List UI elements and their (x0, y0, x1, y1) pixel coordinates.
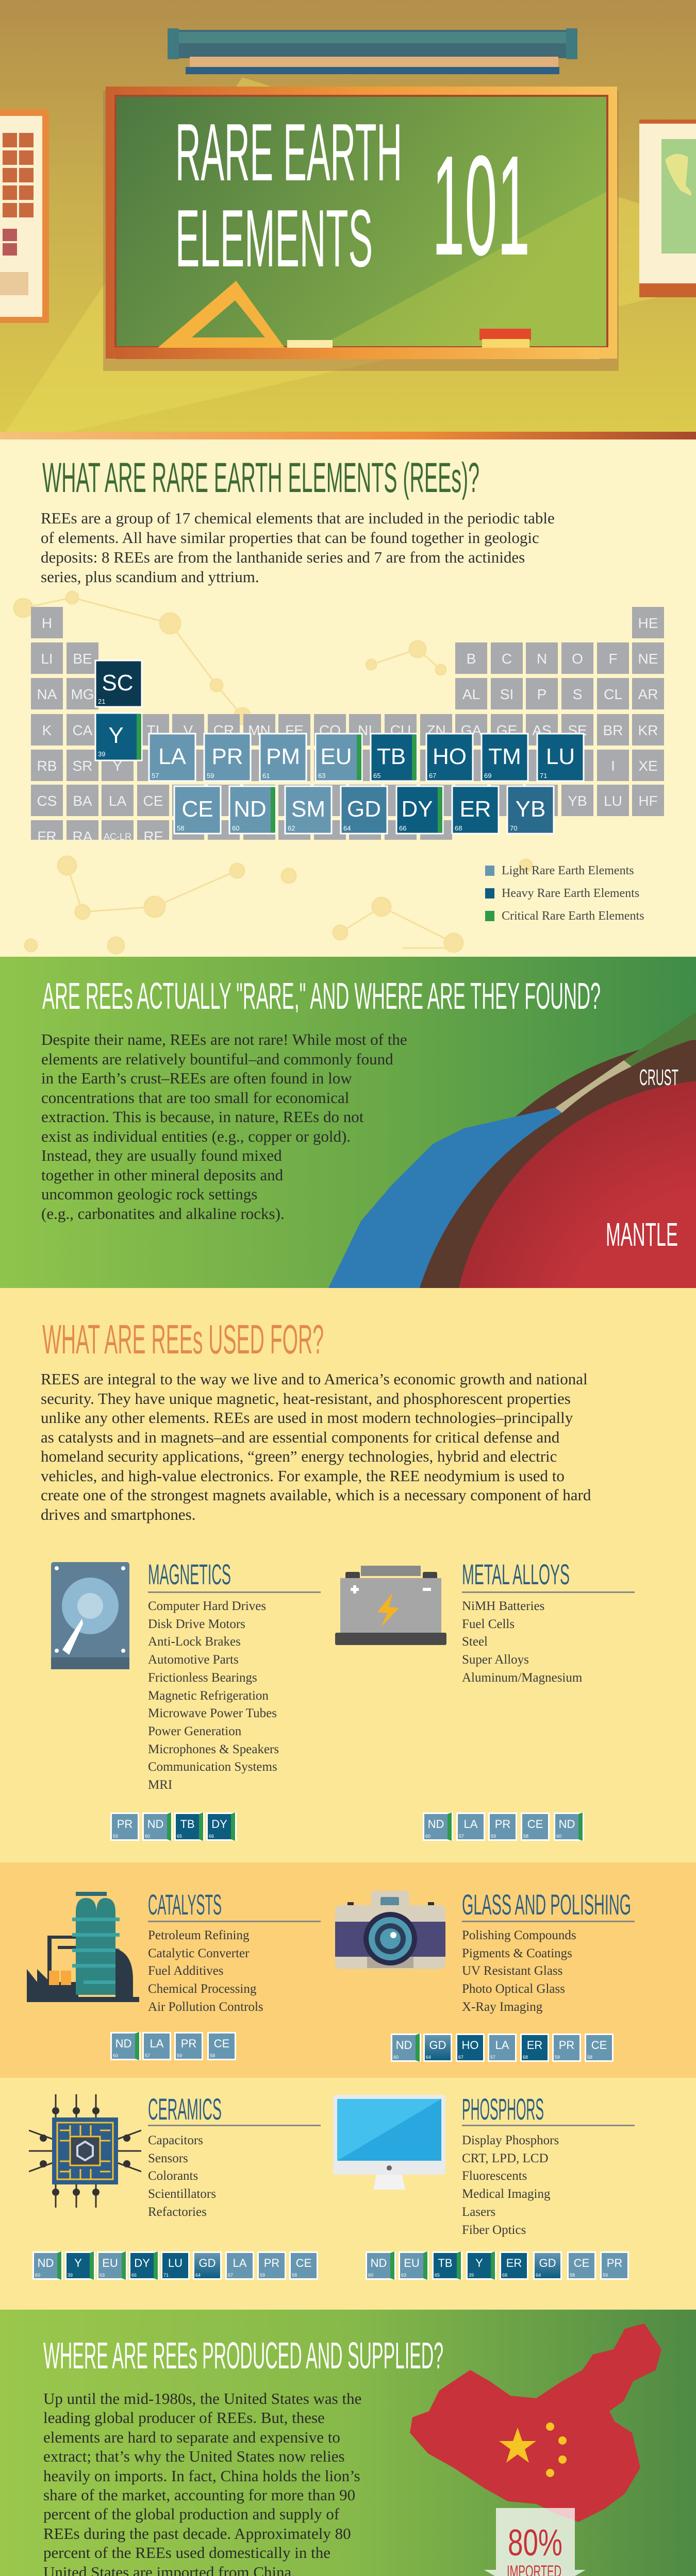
panel: where are REEs produced (green) (0, 2310, 696, 2576)
badges: catalyst elements: 58 (210, 2053, 215, 2058)
periodic table chart: 64 (343, 824, 351, 832)
list: alloy uses (462, 1599, 582, 1685)
list: catalyst uses: Catalytic Converter (148, 1946, 249, 1960)
text: uses intro (41, 1370, 591, 1523)
badges: ceramic elements: EU (102, 2257, 118, 2269)
text: rarity explanation: concentrations that are too small for economical (41, 1088, 349, 1107)
icon: chalk and eraser (287, 329, 531, 348)
text: rarity explanation: in the Earth’s crust–REEs are often found in low (41, 1069, 352, 1087)
panel: magnetics (51, 1562, 279, 1841)
periodic table chart: SI (500, 686, 513, 702)
header: classroom chalkboard (0, 0, 696, 439)
badges: ceramic elements: 64 (195, 2273, 201, 2278)
text: rarity explanation: extraction. This is because, in nature, REEs do not (41, 1108, 363, 1126)
list: phosphor uses: Fiber Optics (462, 2223, 526, 2237)
badges: catalyst elements: LA (150, 2037, 163, 2050)
periodic table chart: V (184, 722, 193, 738)
list: phosphor uses: Fluorescents (462, 2169, 527, 2183)
badges: catalyst elements: 60 (113, 2053, 118, 2058)
badges: phosphor elements: ER (506, 2257, 522, 2269)
badges: ceramic elements: CE (296, 2257, 311, 2269)
highlighted rare earth elements (95, 660, 584, 834)
badges: ceramic elements: DY (134, 2257, 150, 2269)
list: alloy uses: NiMH Batteries (462, 1599, 544, 1613)
header: classroom chalkboard: 101 (432, 126, 530, 285)
badges: phosphor elements: PR (607, 2257, 622, 2269)
section background: what are REEs (0, 439, 696, 957)
list: magnetics uses: Automotive Parts (148, 1653, 239, 1667)
icon: camera (335, 1891, 445, 1969)
periodic table chart: 60 (232, 824, 239, 832)
badges: phosphor elements: ND (371, 2257, 387, 2269)
badges: glass elements: CE (591, 2039, 607, 2052)
text: REE definition: of elements. All have similar properties that can be found together in geologic (41, 529, 539, 547)
periodic table chart: 21 (98, 698, 105, 705)
list: phosphor uses: Display Phosphors (462, 2133, 559, 2147)
badges: alloy elements: 60 (425, 1834, 430, 1839)
text: supply explanation: percent of the global production and supply of (43, 2505, 339, 2523)
periodic table chart: HE (638, 615, 658, 631)
periodic table chart: GA (461, 722, 482, 738)
panel: catalysts (27, 1892, 263, 2060)
text: supply explanation: extract; that’s why the United States now relies (43, 2447, 345, 2465)
badges: ceramic elements: 59 (260, 2273, 265, 2278)
badges: phosphor elements: TB (438, 2257, 453, 2269)
board title: RARE EARTH (175, 107, 402, 198)
category titles and rules: METAL ALLOYS (462, 1558, 570, 1590)
badges: glass elements: ER (527, 2039, 542, 2052)
badges: ceramic elements: GD (199, 2257, 216, 2269)
category titles and rules: PHOSPHORS (462, 2093, 544, 2126)
periodic table chart: ZN (426, 722, 446, 738)
badges: ceramic elements: PR (264, 2257, 279, 2269)
badges: ceramic elements: 57 (228, 2273, 233, 2278)
text: rarity explanation: uncommon geologic rock settings (41, 1185, 257, 1203)
periodic table chart: GD (347, 796, 381, 822)
periodic table chart: CE (143, 793, 163, 809)
badges: alloy elements: ND (428, 1818, 444, 1831)
text: supply explanation: REEs during the past decade. Approximately 80 (43, 2524, 351, 2543)
periodic table chart: CA (73, 722, 93, 738)
category titles and rules: MAGNETICS (148, 1558, 231, 1590)
text: rarity explanation (41, 1030, 407, 1222)
text: REE definition: REEs are a group of 17 chemical elements that are included in the periodic table (41, 509, 555, 527)
periodic table chart: LA (109, 793, 126, 809)
panel: metal alloys (335, 1566, 584, 1841)
periodic table chart: 70 (510, 824, 517, 832)
badges: alloy elements: PR (495, 1818, 510, 1831)
icon: monitor (333, 2095, 445, 2190)
list: alloy uses: Fuel Cells (462, 1617, 515, 1631)
chalkboard ledge (116, 348, 600, 359)
text: rarity explanation: exist as individual entities (e.g., copper or gold). (41, 1127, 351, 1145)
badges: glass elements: 57 (490, 2055, 495, 2060)
list: alloy uses: Steel (462, 1635, 488, 1649)
legend: Heavy Rare Earth Elements (502, 887, 639, 900)
periodic table chart: BE (73, 651, 92, 667)
badges: alloy elements: 59 (491, 1834, 496, 1839)
list: magnetics uses: Magnetic Refrigeration (148, 1689, 269, 1703)
periodic table chart: PR (211, 744, 243, 769)
badges: ceramic elements: 60 (35, 2273, 40, 2278)
text: uses intro: vehicles, and high-value electronics. For example, the REE neodymium is used to (41, 1466, 565, 1485)
badges: phosphor elements: 63 (401, 2273, 406, 2278)
category titles and rules (148, 1558, 635, 2126)
badges: glass elements: 67 (458, 2055, 463, 2060)
list: ceramic uses (148, 2133, 216, 2219)
text: uses intro: create one of the strongest magnets available, which is a necessary component of hard (41, 1486, 591, 1504)
list: ceramic uses: Colorants (148, 2169, 198, 2183)
text: rarity explanation: together in other mineral deposits and (41, 1165, 283, 1184)
text: rarity explanation: Despite their name, REEs are not rare! While most of the (41, 1030, 407, 1048)
text: supply explanation: Up until the mid-1980s, the United States was the (43, 2389, 361, 2408)
list: magnetics uses: Anti-Lock Brakes (148, 1635, 241, 1649)
list: catalyst uses: Fuel Additives (148, 1964, 224, 1978)
periodic table chart: HO (433, 744, 467, 769)
periodic table chart: I (611, 758, 615, 774)
periodic table chart: TI (147, 722, 159, 738)
badges: catalyst elements: 57 (145, 2053, 150, 2058)
badges: ceramic elements: 63 (100, 2273, 105, 2278)
list: magnetics uses (148, 1599, 279, 1792)
periodic table chart: FE (285, 722, 304, 738)
periodic table chart: C (502, 651, 512, 667)
periodic table chart: BR (603, 722, 623, 738)
badges: phosphor elements: Y (475, 2257, 483, 2269)
periodic table chart: 67 (429, 772, 436, 779)
badges: catalyst elements: ND (115, 2037, 131, 2050)
decorative molecule background (13, 590, 533, 954)
badges: catalyst elements: PR (181, 2037, 196, 2050)
badges: glass elements: GD (429, 2039, 446, 2052)
list: glass uses: Photo Optical Glass (462, 1982, 565, 1996)
badges: phosphor elements: GD (539, 2257, 556, 2269)
list: ceramic uses: Capacitors (148, 2133, 203, 2147)
badges: phosphor elements: CE (574, 2257, 589, 2269)
list: alloy uses: Super Alloys (462, 1653, 529, 1667)
badges: catalyst elements: 59 (177, 2053, 182, 2058)
list: ceramic uses: Refactories (148, 2205, 207, 2219)
badges: phosphor elements: 68 (502, 2273, 507, 2278)
badges: magnetics elements: 66 (209, 1834, 214, 1839)
badges: alloy elements: CE (527, 1818, 543, 1831)
periodic table chart: S (573, 686, 582, 702)
periodic table chart: NI (358, 722, 372, 738)
badges: magnetics elements: 65 (177, 1834, 182, 1839)
badges: glass elements: 58 (587, 2055, 592, 2060)
periodic table chart: Y (113, 758, 123, 774)
periodic table chart: CR (213, 722, 234, 738)
text: supply explanation: percent of the REEs used domestically in the (43, 2544, 330, 2562)
legend: Critical Rare Earth Elements (502, 909, 644, 923)
badges: ceramic elements: Y (74, 2257, 82, 2269)
category titles and rules: CATALYSTS (148, 1888, 222, 1921)
periodic table chart: HF (638, 793, 658, 809)
chalkboard surface (117, 97, 606, 346)
badges: glass elements: 68 (523, 2055, 528, 2060)
periodic table chart: CO (319, 722, 341, 738)
legend (485, 864, 644, 923)
badges: alloy elements (423, 1812, 584, 1841)
text: uses intro: homeland security applications, “green” energy technologies, hybrid and electric (41, 1447, 557, 1465)
badges: alloy elements: 58 (523, 1834, 528, 1839)
badges: glass elements: 59 (555, 2055, 560, 2060)
badges: ceramic elements: 39 (68, 2273, 73, 2278)
badges: alloy elements: LA (464, 1818, 477, 1831)
periodic table chart: DY (401, 796, 433, 822)
badges: glass elements: 60 (393, 2055, 399, 2060)
periodic table chart: ND (234, 796, 267, 822)
periodic table chart: 66 (399, 824, 406, 832)
periodic table chart: PM (266, 744, 300, 769)
periodic table chart: KR (638, 722, 658, 738)
periodic table chart: NE (638, 651, 658, 667)
badges: phosphor elements: 65 (435, 2273, 440, 2278)
list: magnetics uses: Frictionless Bearings (148, 1671, 257, 1685)
icon: circuit chip (29, 2094, 141, 2208)
periodic table chart: XE (638, 758, 658, 774)
text: uses intro: unlike any other elements. REEs are used in most modern technologies–principally (41, 1409, 573, 1427)
periodic table chart: CL (604, 686, 622, 702)
list: magnetics uses: Disk Drive Motors (148, 1617, 245, 1631)
text: REE definition: deposits: 8 REEs are from the lanthanide series and 7 are from the actinides (41, 548, 525, 566)
list: phosphor uses (462, 2133, 559, 2237)
left poster (0, 109, 49, 323)
periodic table chart: TM (488, 744, 521, 769)
badges: ceramic elements: 71 (163, 2273, 169, 2278)
periodic table chart: BA (73, 793, 92, 809)
periodic table chart: SE (568, 722, 587, 738)
periodic table chart: F (608, 651, 618, 667)
legend: Light Rare Earth Elements (502, 864, 634, 877)
badges: phosphor elements: 39 (469, 2273, 474, 2278)
list: catalyst uses (148, 1928, 263, 2014)
list: magnetics uses: Communication Systems (148, 1760, 277, 1774)
text: supply explanation: share of the market, accounting for more than 90 (43, 2486, 355, 2504)
periodic table chart: CU (390, 722, 411, 738)
badges: phosphor elements: EU (404, 2257, 420, 2269)
periodic table chart: LU (604, 793, 622, 809)
text: supply explanation: heavily on imports. In fact, China holds the lion’s (43, 2467, 360, 2485)
badges: ceramic elements: LU (168, 2257, 183, 2269)
periodic table chart: K (42, 722, 52, 738)
badges: glass elements: ND (396, 2039, 412, 2052)
periodic table chart: LA (158, 744, 187, 769)
badges: glass elements: LA (495, 2039, 509, 2052)
periodic table chart: H (42, 615, 52, 631)
badges: ceramic elements: 58 (292, 2273, 297, 2278)
list: catalyst uses: Petroleum Refining (148, 1928, 250, 1942)
badges: magnetics elements: 60 (145, 1834, 150, 1839)
panel: are REEs rare (green) (0, 957, 696, 1288)
periodic table chart: SC (102, 670, 134, 696)
text: uses intro: as catalysts and in magnets–and are essential components for critical defense and (41, 1428, 559, 1446)
badges: phosphor elements (366, 2251, 634, 2282)
badges: phosphor elements: 64 (536, 2273, 541, 2278)
periodic table chart: 61 (262, 772, 270, 779)
badges: magnetics elements: DY (211, 1818, 227, 1831)
list: phosphor uses: Lasers (462, 2205, 495, 2219)
badges: phosphor elements: 58 (570, 2273, 575, 2278)
badges: glass elements: PR (559, 2039, 574, 2052)
panel: ceramics (29, 2094, 318, 2280)
text: uses intro: REES are integral to the way we live and to America’s economic growth and national (41, 1370, 588, 1388)
icon: hard drive (51, 1562, 129, 1669)
badges: catalyst elements (110, 2032, 236, 2060)
badges: glass elements (391, 2033, 614, 2062)
board title (175, 107, 530, 285)
periodic table chart: MN (248, 722, 271, 738)
periodic table chart: 65 (373, 772, 380, 779)
badges: catalyst elements: CE (214, 2037, 229, 2050)
periodic table chart: 71 (540, 772, 547, 779)
periodic table chart: YB (568, 793, 587, 809)
badges: ceramic elements: 66 (131, 2273, 137, 2278)
periodic table chart: AR (638, 686, 658, 702)
list: catalyst uses: Chemical Processing (148, 1982, 256, 1996)
list: phosphor uses: CRT, LPD, LCD (462, 2151, 549, 2165)
list: glass uses (462, 1928, 576, 2014)
badges: magnetics elements: ND (147, 1818, 163, 1831)
panel: glass and polishing (335, 1891, 614, 2062)
periodic table chart: AS (532, 722, 552, 738)
periodic table chart: 58 (177, 824, 184, 832)
badges: phosphor elements: 59 (603, 2273, 608, 2278)
text: REE definition (41, 509, 555, 586)
badges: ceramic elements: ND (38, 2257, 54, 2269)
badges: alloy elements: 57 (459, 1834, 464, 1839)
periodic table chart: Y (108, 723, 124, 748)
text: REE definition: series, plus scandium and yttrium. (41, 568, 259, 586)
list: magnetics uses: Power Generation (148, 1724, 241, 1738)
periodic table chart: 59 (207, 772, 214, 779)
badges: alloy elements: ND (559, 1818, 575, 1831)
periodic table chart: LU (546, 744, 575, 769)
panel background: uses band (0, 1862, 696, 2078)
list: catalyst uses: Air Pollution Controls (148, 2000, 263, 2014)
list: magnetics uses: Microwave Power Tubes (148, 1706, 277, 1720)
periodic table chart: 39 (98, 750, 105, 758)
category titles and rules: CERAMICS (148, 2093, 222, 2126)
text: uses intro: drives and smartphones. (41, 1505, 195, 1523)
periodic table chart (31, 607, 664, 840)
text: uses intro: security. They have unique magnetic, heat-resistant, and phosphorescent properties (41, 1389, 571, 1408)
arrow: 80% imported: 80% (508, 2522, 562, 2564)
periodic table chart: SM (291, 796, 325, 822)
text: rarity explanation: Instead, they are usually found mixed (41, 1146, 282, 1164)
periodic table chart: SR (73, 758, 92, 774)
list: glass uses: Polishing Compounds (462, 1928, 576, 1942)
periodic table chart: YB (516, 796, 545, 822)
periodic table chart: 63 (318, 772, 325, 779)
periodic table chart: 68 (455, 824, 462, 832)
badges: ceramic elements: LA (233, 2257, 246, 2269)
periodic table chart: CS (37, 793, 57, 809)
list: phosphor uses: Medical Imaging (462, 2187, 550, 2201)
periodic table chart: AL (462, 686, 480, 702)
text: rarity explanation: elements are relatively bountiful–and commonly found (41, 1050, 393, 1067)
periodic table chart: B (467, 651, 476, 667)
periodic table chart: N (537, 651, 547, 667)
badges: glass elements: 64 (426, 2055, 431, 2060)
periodic table chart: RB (37, 758, 57, 774)
badges: phosphor elements: 60 (368, 2273, 373, 2278)
periodic table chart: GE (496, 722, 517, 738)
periodic table chart: LI (41, 651, 53, 667)
text: rarity explanation: (e.g., carbonatites and alkaline rocks). (41, 1205, 285, 1222)
list: magnetics uses: Computer Hard Drives (148, 1599, 266, 1613)
periodic table chart: ER (459, 796, 491, 822)
periodic table chart: MG (71, 686, 94, 702)
badges: ceramic elements (32, 2251, 318, 2280)
list: glass uses: UV Resistant Glass (462, 1964, 562, 1978)
badges: magnetics elements (110, 1812, 237, 1841)
periodic table chart: O (572, 651, 583, 667)
icon: refinery (27, 1892, 139, 2002)
periodic table chart: EU (320, 744, 352, 769)
text: supply explanation: leading global producer of REEs. But, these (43, 2409, 325, 2427)
badges: alloy elements: 60 (556, 1834, 561, 1839)
board title: ELEMENTS (175, 193, 373, 284)
chalkboard frame (103, 90, 619, 371)
badges: glass elements: HO (462, 2039, 478, 2052)
list: magnetics uses: Microphones & Speakers (148, 1742, 279, 1756)
text: supply explanation: elements are hard to separate and expensive to (43, 2428, 340, 2446)
periodic table chart: P (537, 686, 546, 702)
badges: magnetics elements: TB (180, 1818, 195, 1831)
projector screen roll (168, 28, 577, 74)
badges: magnetics elements: PR (117, 1818, 132, 1831)
text: supply explanation (43, 2389, 361, 2576)
list: glass uses: Pigments & Coatings (462, 1946, 572, 1960)
periodic table chart: NA (37, 686, 57, 702)
list: ceramic uses: Sensors (148, 2151, 188, 2165)
icon: triangle ruler (158, 281, 285, 348)
badges: magnetics elements: 59 (113, 1834, 118, 1839)
periodic table chart: CE (181, 796, 213, 822)
periodic table chart: 69 (484, 772, 491, 779)
periodic table chart: 57 (152, 772, 159, 779)
list: glass uses: X-Ray Imaging (462, 2000, 542, 2014)
list: alloy uses: Aluminum/Magnesium (462, 1671, 582, 1685)
list: ceramic uses: Scientillators (148, 2187, 216, 2201)
arrow: 80% imported (484, 2508, 586, 2576)
periodic table chart: 62 (288, 824, 295, 832)
right poster: map (639, 120, 696, 297)
icon: battery (335, 1566, 446, 1645)
periodic table chart: TB (377, 744, 406, 769)
list: magnetics uses: MRI (148, 1778, 172, 1792)
illustration: earth layers (328, 1012, 696, 1661)
panel: phosphors (333, 2095, 629, 2280)
map: china (410, 2324, 661, 2522)
